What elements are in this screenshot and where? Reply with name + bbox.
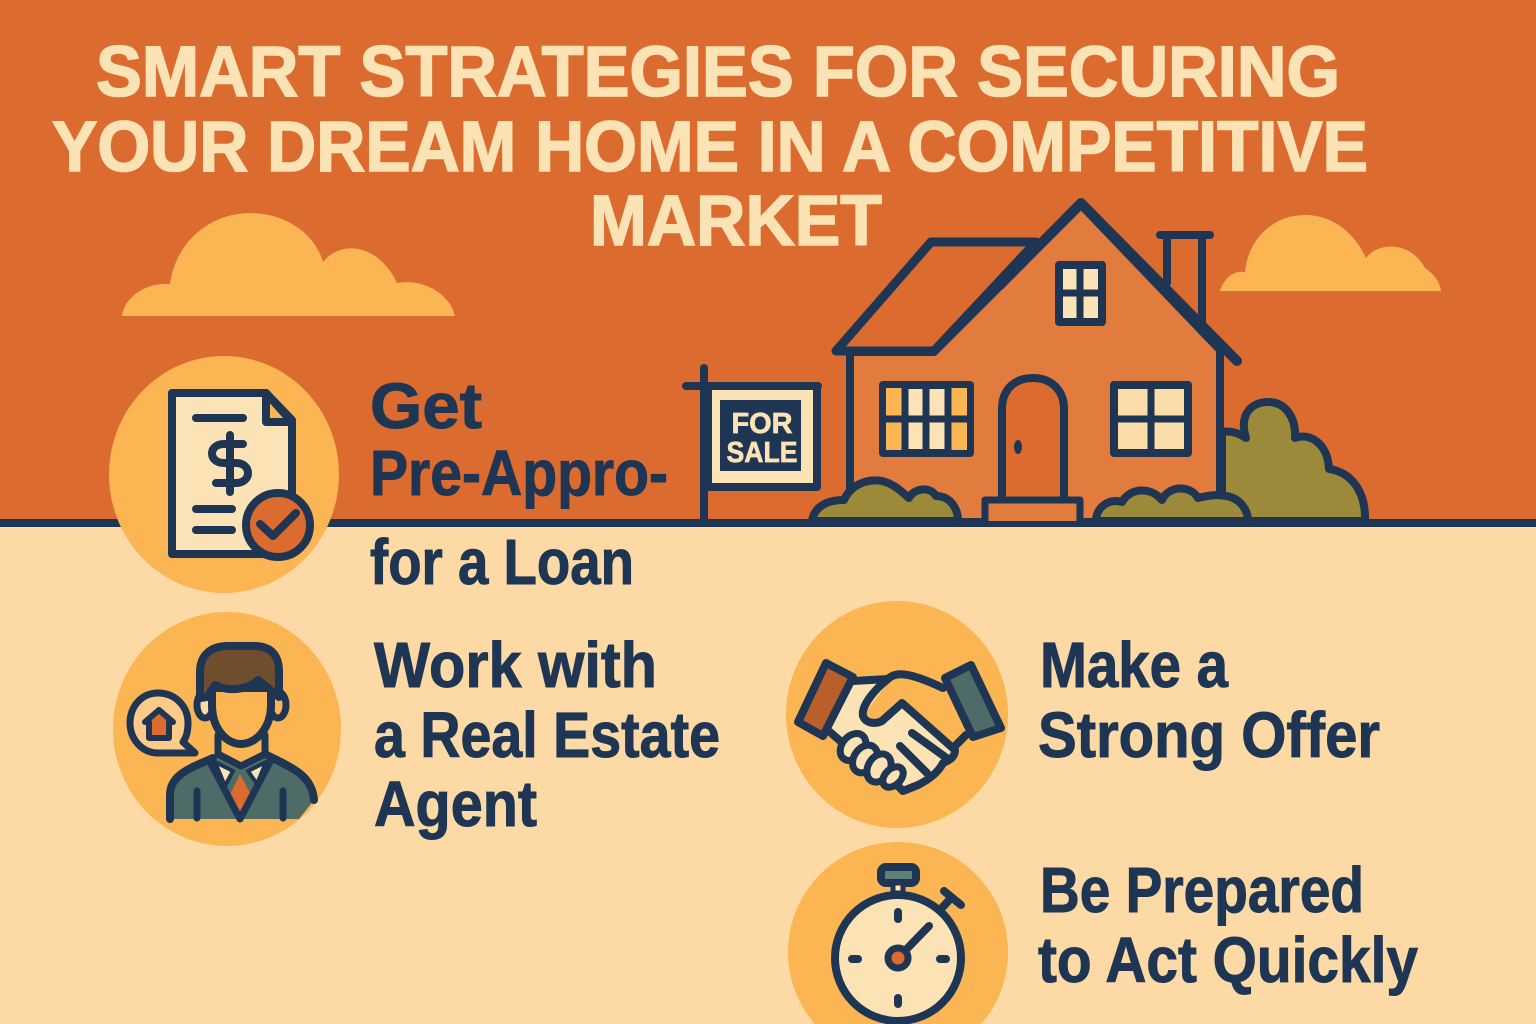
right cuff bbox=[945, 665, 1001, 737]
strategy 1: text bbox=[370, 370, 668, 598]
door step bbox=[985, 500, 1080, 521]
lapel lines bbox=[208, 758, 272, 819]
document bbox=[172, 393, 292, 554]
document fold bbox=[266, 393, 292, 422]
chimney bbox=[1160, 235, 1210, 322]
finger ellipses bbox=[835, 728, 907, 791]
title: SMART STRATEGIES FOR SECURING bbox=[96, 33, 1340, 112]
strategy 1: text: for a Loan bbox=[370, 526, 634, 598]
attic window bbox=[1059, 265, 1102, 322]
strategy 3: text: Make a bbox=[1040, 629, 1228, 701]
finger lines bbox=[900, 733, 948, 773]
dollar sign bbox=[212, 435, 248, 492]
strategy 4: text: to Act Quickly bbox=[1038, 924, 1418, 996]
background: orange sky bbox=[0, 0, 1536, 523]
strategy 1: text: Get bbox=[370, 370, 482, 442]
circle bbox=[786, 601, 1008, 828]
suit outline bbox=[170, 755, 314, 819]
strategy 2: text bbox=[374, 629, 720, 840]
sign board bbox=[708, 386, 817, 487]
cloud: right bbox=[1220, 215, 1441, 291]
hand outline bbox=[830, 674, 966, 791]
cloud: left bbox=[122, 213, 455, 316]
roof gable lines bbox=[1000, 203, 1237, 361]
strategy 3: text bbox=[1038, 629, 1380, 771]
document lines bbox=[196, 418, 243, 530]
ground line bbox=[0, 519, 1536, 527]
strategy 2: text: Agent bbox=[374, 768, 537, 840]
watch centre bbox=[888, 948, 908, 968]
bush: front right bbox=[1096, 488, 1248, 521]
collar bbox=[215, 762, 266, 786]
house body bbox=[850, 205, 1220, 522]
sign text bbox=[726, 408, 798, 469]
house bbox=[836, 203, 1237, 522]
roof bbox=[836, 242, 1036, 351]
strategy 4: text bbox=[1038, 854, 1418, 996]
side knob bbox=[940, 891, 961, 910]
watch hand bbox=[898, 926, 929, 958]
strategy 3: text: Strong Offer bbox=[1038, 699, 1380, 771]
sign text: FOR bbox=[732, 408, 793, 440]
for sale sign bbox=[686, 368, 818, 522]
bush: large right bbox=[1222, 402, 1365, 521]
circle bbox=[113, 612, 341, 846]
circle bbox=[109, 356, 339, 593]
strategy 2: text: a Real Estate bbox=[374, 699, 720, 771]
sign text: SALE bbox=[726, 437, 798, 469]
strategy 3: circle icon handshake bbox=[786, 601, 1008, 828]
strategy 1: circle icon document bbox=[109, 356, 339, 593]
bush: front left bbox=[812, 480, 958, 521]
tie bbox=[229, 774, 252, 818]
left window bbox=[883, 385, 970, 453]
speech bubble house bbox=[145, 710, 173, 738]
hair bbox=[200, 646, 279, 698]
strategy 1: text: Pre-Appro- bbox=[370, 437, 668, 509]
strategy 2: circle icon agent bbox=[113, 612, 341, 846]
speech bubble bbox=[130, 693, 195, 753]
title: YOUR DREAM HOME IN A COMPETITIVE bbox=[52, 108, 1368, 187]
circle bbox=[788, 842, 1008, 1024]
suit seams bbox=[197, 791, 283, 818]
neck bbox=[218, 735, 265, 766]
title: MARKET bbox=[590, 182, 882, 261]
left cuff bbox=[798, 663, 853, 736]
suit bbox=[170, 755, 314, 819]
watch face bbox=[835, 895, 961, 1021]
right window bbox=[1114, 385, 1188, 453]
background: cream lower panel bbox=[0, 523, 1536, 1024]
ears bbox=[197, 692, 286, 718]
face bbox=[212, 688, 271, 744]
hand cream bbox=[830, 680, 955, 790]
crown bbox=[881, 867, 916, 893]
strategy 4: circle icon stopwatch bbox=[788, 842, 1008, 1024]
strategy 2: text: Work with bbox=[374, 629, 657, 701]
door bbox=[1002, 378, 1064, 497]
sign post bbox=[686, 368, 818, 522]
title bbox=[52, 33, 1368, 261]
strategy 4: text: Be Prepared bbox=[1040, 854, 1364, 926]
check badge bbox=[246, 493, 310, 557]
ticks bbox=[852, 912, 946, 1004]
